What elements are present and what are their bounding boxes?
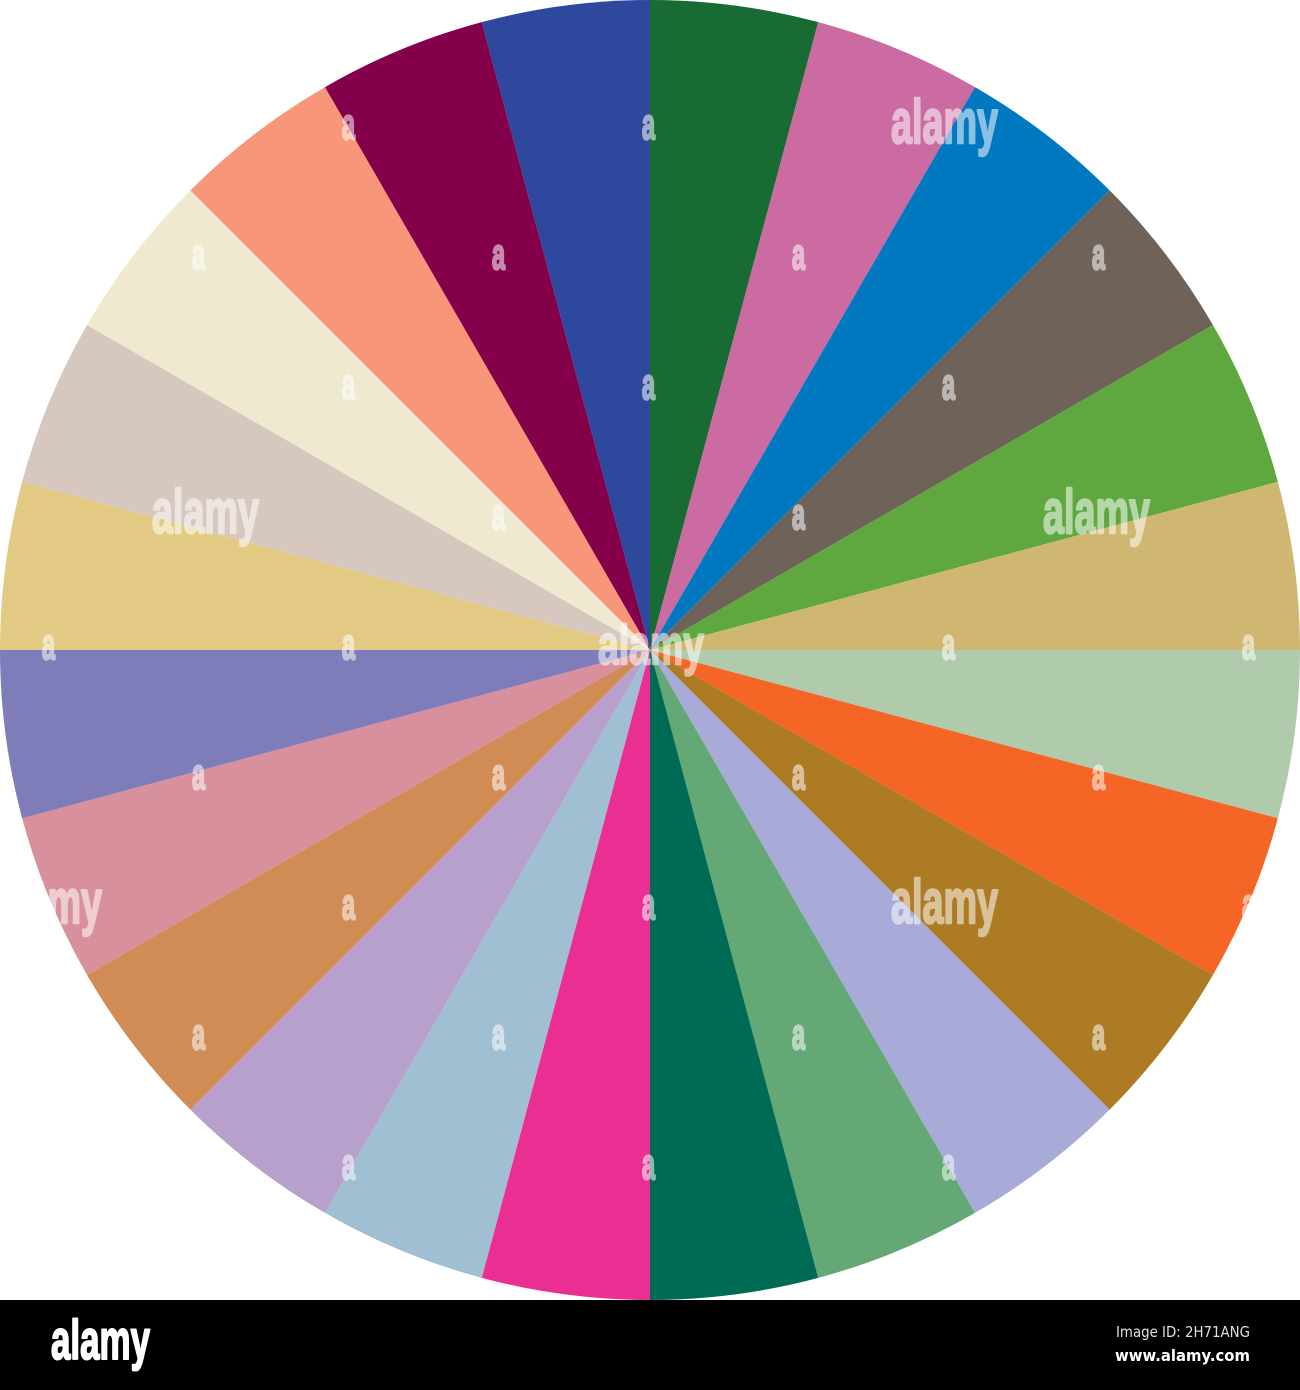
watermark: small repeated a marks: a (642, 360, 655, 409)
watermark: small repeated a marks: a (642, 880, 655, 929)
watermark: small repeated a marks: a (342, 360, 355, 409)
watermark: small repeated a marks: a (792, 230, 805, 279)
watermark: large alamy marks: alamy (0, 868, 102, 937)
watermark: small repeated a marks: a (342, 100, 355, 149)
watermark: small repeated a marks: a (1092, 750, 1105, 799)
footer bar (0, 1300, 1300, 1390)
footer image id: Image ID: 2H71ANG (1116, 1323, 1250, 1341)
watermark: small repeated a marks: a (942, 1140, 955, 1189)
watermark: small repeated a marks: a (342, 1140, 355, 1189)
watermark: small repeated a marks: a (792, 490, 805, 539)
watermark: small repeated a marks: a (342, 620, 355, 669)
watermark: small repeated a marks: a (642, 100, 655, 149)
watermark: large alamy marks: alamy (152, 478, 259, 547)
watermark: large alamy marks: alamy (598, 613, 704, 676)
watermark: large alamy marks (0, 88, 1150, 937)
watermark: small repeated a marks: a (492, 230, 505, 279)
watermark: small repeated a marks: a (492, 490, 505, 539)
watermark: small repeated a marks: a (792, 750, 805, 799)
watermark: small repeated a marks: a (942, 620, 955, 669)
watermark: large alamy marks: alamy (891, 868, 998, 937)
watermark: small repeated a marks: a (492, 750, 505, 799)
watermark: small repeated a marks: a (192, 230, 205, 279)
watermark: small repeated a marks (42, 100, 1255, 1189)
watermark: small repeated a marks: a (42, 620, 55, 669)
watermark: small repeated a marks: a (492, 1010, 505, 1059)
footer website: www.alamy.com (1115, 1346, 1250, 1365)
watermark: small repeated a marks: a (1242, 620, 1255, 669)
watermark: small repeated a marks: a (192, 750, 205, 799)
footer logo: alamy (51, 1308, 150, 1371)
watermark: small repeated a marks: a (1242, 880, 1255, 929)
watermark: small repeated a marks: a (792, 1010, 805, 1059)
watermark: small repeated a marks: a (342, 880, 355, 929)
watermark: large alamy marks: alamy (891, 88, 998, 157)
watermark: small repeated a marks: a (1092, 1010, 1105, 1059)
watermark: small repeated a marks: a (1092, 230, 1105, 279)
watermark: small repeated a marks: a (192, 1010, 205, 1059)
watermark: small repeated a marks: a (642, 1140, 655, 1189)
watermark: small repeated a marks: a (942, 360, 955, 409)
watermark: large alamy marks: alamy (1043, 478, 1150, 547)
